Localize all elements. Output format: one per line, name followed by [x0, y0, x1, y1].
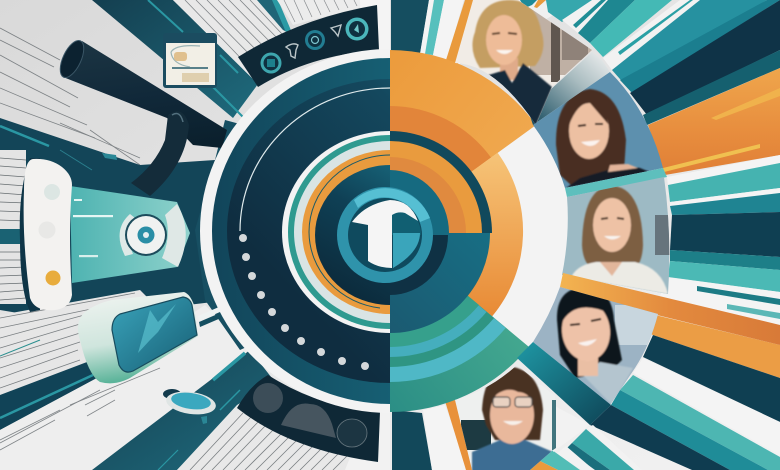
teal ring: [212, 58, 390, 404]
inner orange: [390, 141, 482, 233]
bottom striped ray: [177, 408, 378, 470]
blob 2: [281, 403, 336, 438]
photo: woman blue backdrop: [533, 72, 663, 188]
green sector: [390, 231, 529, 412]
bottom navy ray: [92, 350, 275, 470]
bottom center rays: [392, 410, 432, 470]
orange middle sector: [390, 153, 523, 316]
photo: woman dark hair: [533, 287, 658, 404]
teal accent lines: [148, 0, 246, 120]
blob 3: [337, 419, 367, 447]
dark orange sector: [390, 106, 491, 231]
green ring: [288, 135, 390, 329]
left navy ray: [0, 118, 230, 320]
strip: upper right gradient: [528, 52, 610, 125]
outer white ring: [200, 49, 390, 413]
photo: woman top: [455, 0, 592, 124]
card: [163, 33, 217, 88]
top white patch: [360, 0, 390, 52]
lens device: [78, 292, 221, 383]
photo: woman white shirt: [562, 177, 670, 294]
dark teal ring: [390, 131, 492, 233]
lower navy ray: [0, 362, 97, 430]
lower white ray: [0, 305, 250, 470]
top icon panel: [238, 5, 379, 87]
top striped ray: [277, 0, 362, 25]
icon: dark tube: [55, 37, 227, 196]
device connector: [198, 307, 220, 321]
dark inner disc: [315, 165, 390, 305]
dark logo ring: [390, 235, 448, 295]
bottom white patch: [345, 408, 390, 470]
dot row: [239, 234, 369, 370]
logo inner disc: [348, 198, 422, 272]
center logo: [337, 187, 448, 295]
bottom right small rays: [587, 425, 642, 470]
inner teal quadrant: [390, 170, 449, 233]
remote: [20, 158, 72, 312]
blob 1: [253, 383, 283, 413]
upper striped ray: [173, 0, 285, 84]
panel glyph 1: [286, 44, 298, 58]
teal ray: [257, 0, 293, 35]
panel icon 2: [305, 30, 325, 50]
light logo ring: [337, 187, 433, 283]
remote buttons: [44, 184, 60, 200]
main circle: right half: [390, 50, 571, 412]
orange outer sector: [390, 50, 536, 231]
lower teal disc: [390, 233, 490, 333]
panel icon 1: [260, 52, 282, 74]
strip: light teal: [565, 168, 667, 197]
bottom texture panel: [237, 375, 380, 462]
dark band behind ring: [195, 120, 262, 350]
left striped block: [0, 150, 26, 230]
left rays: [0, 0, 378, 470]
inner white ring: [282, 131, 390, 333]
thin white arc: [240, 88, 390, 231]
navy ring: [227, 79, 390, 383]
orange ring: [302, 150, 390, 314]
tube handle: [131, 111, 189, 196]
main circle: left half: [200, 49, 390, 413]
strip: teal diagonal: [517, 342, 611, 425]
right rays: [391, 0, 780, 470]
device screen: [112, 297, 197, 372]
white sector: [390, 125, 571, 347]
upper navy ray: [92, 0, 258, 118]
upper left striped lines: [0, 28, 140, 165]
panel icon 3: [346, 18, 368, 40]
pale ring: [294, 141, 390, 323]
panel bars: [73, 215, 113, 217]
photo: man with glasses: [450, 367, 556, 470]
small oval device: [163, 389, 217, 417]
strip: orange: [560, 273, 780, 345]
logo T: [352, 200, 418, 268]
knob: [120, 214, 167, 256]
lower left striped ray: [0, 290, 150, 395]
teal panel: [70, 186, 190, 283]
panel end cap: [162, 204, 186, 267]
panel glyph 2: [331, 25, 341, 36]
